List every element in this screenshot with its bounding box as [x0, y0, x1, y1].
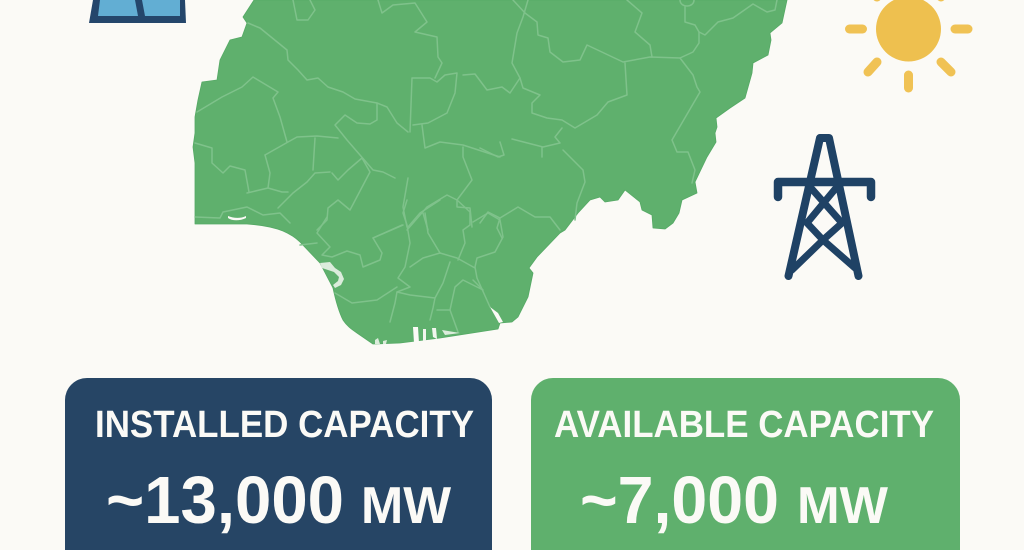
map of region	[193, 0, 787, 344]
heading: installed capacity: INSTALLED CAPACITY	[95, 404, 474, 446]
panel: installed capacity	[65, 378, 492, 550]
value: available capacity: MW	[797, 477, 889, 535]
value: available capacity	[580, 463, 889, 538]
panel: available capacity	[531, 378, 960, 550]
heading: available capacity: AVAILABLE CAPACITY	[554, 404, 934, 446]
icon: solar panel	[89, 0, 186, 23]
value: available capacity: ~7,000	[580, 463, 779, 538]
value: installed capacity: ~13,000	[106, 463, 344, 538]
icon: transmission tower	[778, 138, 871, 276]
icon: sun	[850, 0, 968, 88]
value: installed capacity: MW	[361, 477, 452, 535]
